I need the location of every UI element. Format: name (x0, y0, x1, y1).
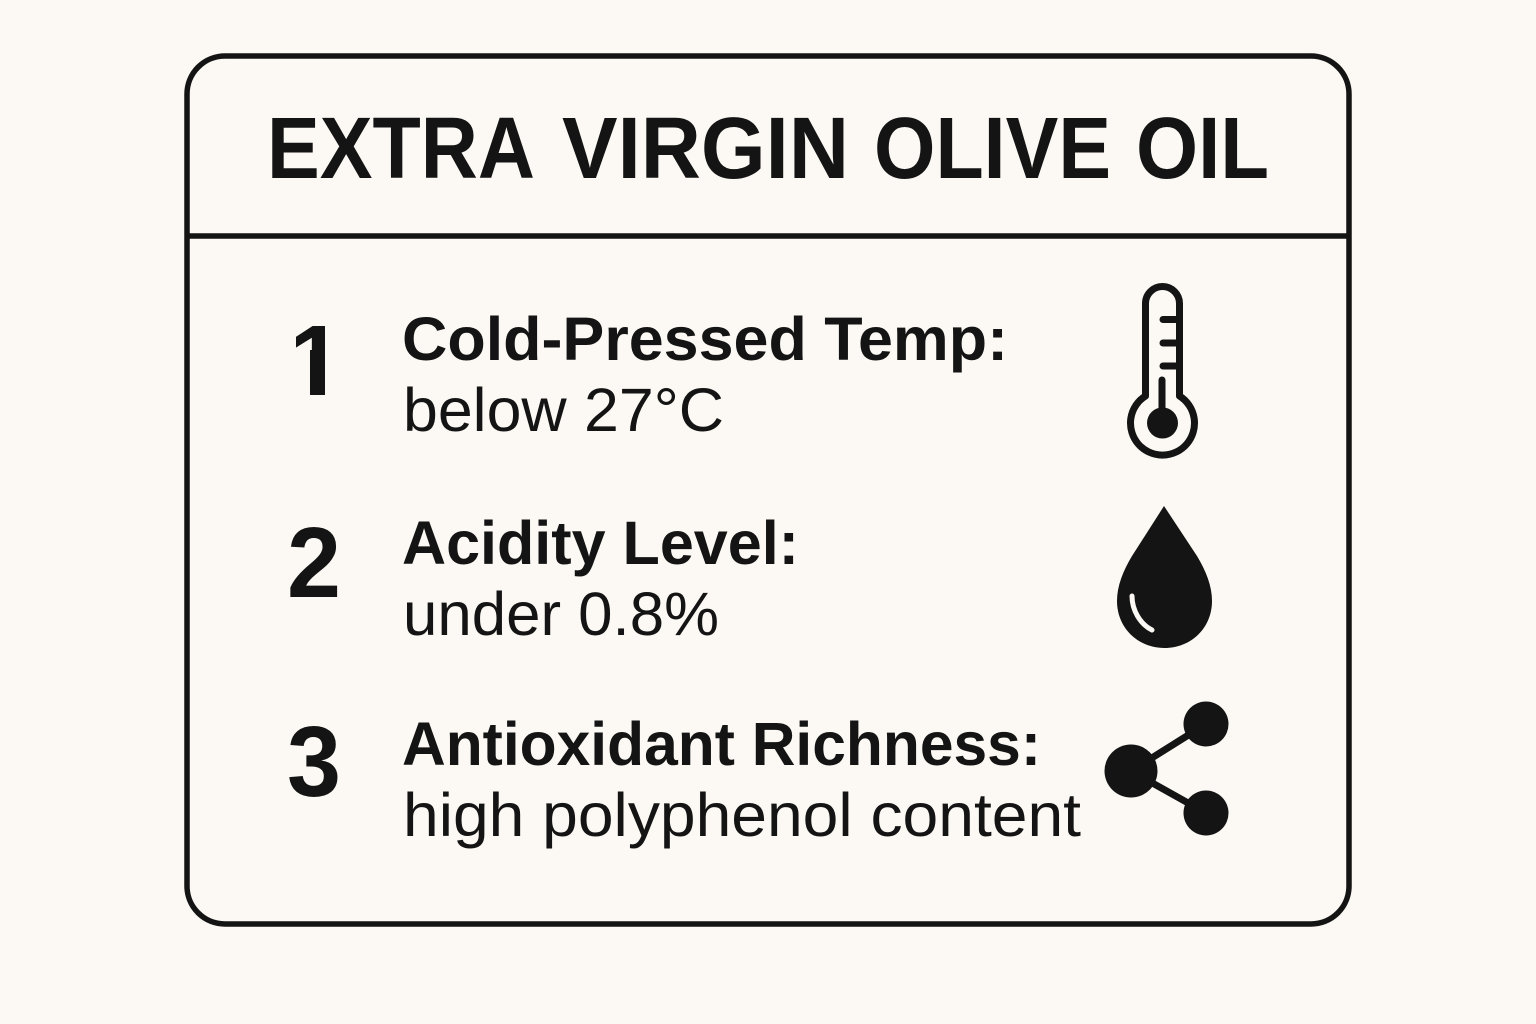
heading: acidity level: Acidity Level: (402, 509, 799, 577)
panel: card outline (187, 56, 1349, 924)
row 2: acidity level (287, 506, 1212, 648)
number 1: 1 (288, 305, 344, 417)
heading: cold-pressed temp: Cold-Pressed Temp: (402, 305, 1008, 373)
icon: thermometer (1130, 286, 1194, 455)
number 3: 3 (287, 706, 341, 818)
title (267, 100, 1269, 197)
title: OLIVE (874, 100, 1111, 197)
title: EXTRA (267, 100, 535, 197)
value: below 27°C: below 27°C (403, 376, 724, 444)
row 1: cold-pressed temperature (288, 286, 1194, 455)
icon: molecule (1104, 702, 1228, 836)
infographic (184, 53, 1352, 927)
icon: oil drop (1117, 506, 1212, 648)
heading: antioxidant richness: Antioxidant Richness: (402, 710, 1041, 778)
value: under 0.8%: under 0.8% (403, 580, 719, 648)
value: high polyphenol content: high polyphenol content (403, 781, 1081, 849)
title: VIRGIN (562, 100, 849, 197)
number 2: 2 (287, 507, 341, 619)
title: OIL (1136, 100, 1269, 197)
row 3: antioxidant richness (287, 702, 1228, 849)
number 1 (296, 326, 325, 395)
